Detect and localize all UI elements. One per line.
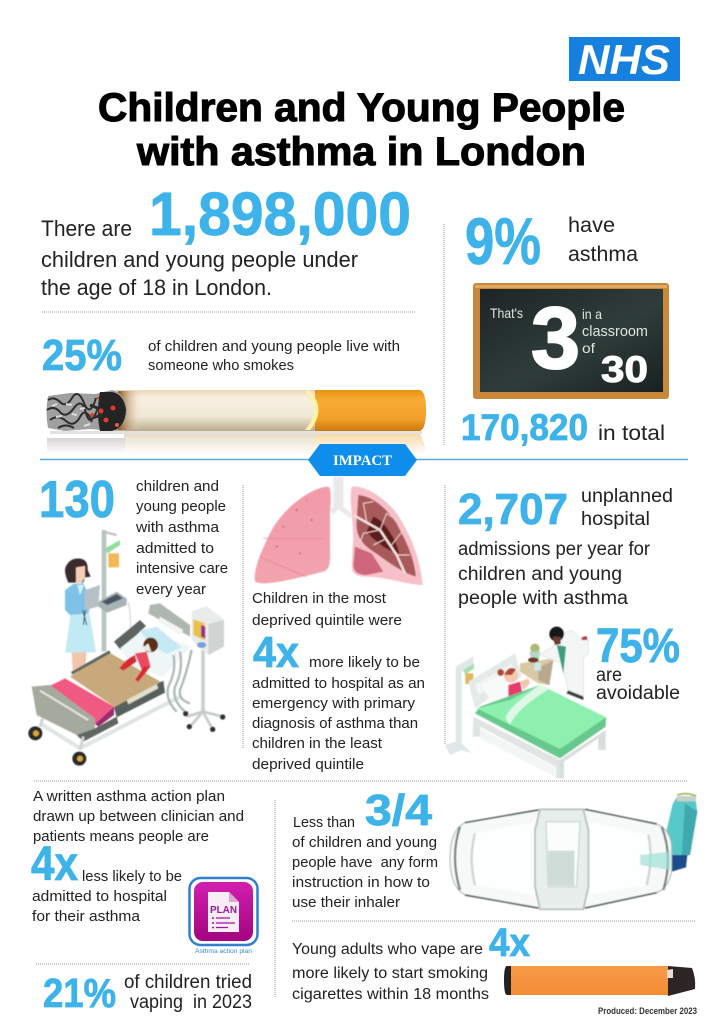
- panel: deprivation: diagnosis of asthma than: [252, 715, 418, 732]
- panel: intensive care: [39, 471, 228, 598]
- panel: 21 percent vaping: of children tried: [124, 972, 252, 993]
- panel: 25 percent smokers: 25%: [42, 331, 122, 380]
- panel: 75 percent avoidable: [596, 620, 680, 704]
- panel: 9 percent: 9%: [465, 204, 541, 278]
- panel: asthma action plan text: admitted to hospital: [32, 888, 167, 905]
- chalkboard: in a: [582, 306, 602, 322]
- icon: action plan: [190, 878, 258, 955]
- panel: vaping and smoking: Young adults who vape are: [292, 941, 483, 958]
- illustration: nurse and hospital bed: [28, 530, 225, 766]
- panel: asthma action plan text: less likely to be: [82, 868, 182, 885]
- panel: 21 percent vaping: [43, 970, 252, 1016]
- title: Children and Young People: [98, 86, 625, 130]
- chalkboard: That's: [490, 305, 523, 321]
- panel: inhaler instruction: instruction in how to: [292, 874, 430, 891]
- panel: 25 percent smokers: [42, 331, 400, 380]
- chalkboard: 3: [531, 290, 580, 387]
- illustration: lungs: [255, 477, 423, 585]
- panel: asthma action plan text: 4x: [31, 838, 78, 891]
- panel: inhaler instruction: use their inhaler: [292, 894, 400, 911]
- NHS logo: NHS: [578, 36, 670, 83]
- panel: intensive care: with asthma: [135, 519, 220, 536]
- panel: vaping and smoking: [292, 921, 530, 1003]
- panel: vaping and smoking: more likely to start smoking: [292, 965, 488, 982]
- panel: deprivation: 4x: [253, 628, 299, 677]
- panel: total: in total: [598, 422, 665, 445]
- panel: population headline: There are: [41, 216, 132, 241]
- chalkboard: 30: [601, 349, 648, 390]
- panel: vaping and smoking: cigarettes within 18 months: [292, 986, 489, 1003]
- chalkboard: classroom: [582, 323, 648, 340]
- divider line: [40, 458, 688, 460]
- chalkboard: of: [582, 340, 595, 356]
- panel: 21 percent vaping: vaping in 2023: [130, 992, 252, 1013]
- panel: unplanned admissions: 2,707: [458, 485, 568, 534]
- panel: deprivation: Children in the most: [252, 590, 387, 607]
- panel: population headline: [41, 180, 411, 300]
- panel: 9 percent: have: [568, 214, 615, 237]
- panel: total: 170,820: [461, 407, 588, 448]
- panel: deprivation: admitted to hospital as an: [252, 675, 425, 692]
- panel: population headline: the age of 18 in London.: [41, 275, 272, 300]
- panel: deprivation: emergency with primary: [252, 695, 416, 712]
- panel: total: [461, 407, 665, 448]
- chalkboard: [473, 283, 669, 399]
- illustration: spacer and inhaler: [450, 794, 697, 909]
- panel: inhaler instruction: 3/4: [365, 786, 433, 835]
- title: [98, 86, 625, 174]
- panel: intensive care: intensive care: [136, 560, 228, 577]
- panel: unplanned admissions: unplanned: [581, 486, 673, 507]
- panel: unplanned admissions: people with asthma: [458, 588, 628, 609]
- panel: inhaler instruction: of children and young: [292, 834, 437, 851]
- panel: intensive care: 130: [39, 471, 115, 529]
- panel: vaping and smoking: 4x: [489, 921, 530, 965]
- panel: deprivation: [252, 590, 425, 773]
- panel: unplanned admissions: children and young: [458, 564, 622, 585]
- panel: asthma action plan text: patients means people are: [33, 828, 209, 845]
- panel: inhaler instruction: people have any form: [292, 854, 438, 871]
- title: with asthma in London: [136, 130, 586, 174]
- panel: 9 percent: asthma: [568, 243, 638, 266]
- illustration: child in green bed with doctor: [445, 627, 606, 778]
- panel: unplanned admissions: hospital: [581, 509, 650, 530]
- panel: deprivation: deprived quintile: [252, 756, 364, 773]
- panel: population headline: 1,898,000: [149, 180, 411, 248]
- panel: asthma action plan text: for their asthma: [32, 908, 141, 925]
- panel: inhaler instruction: [292, 786, 438, 911]
- panel: asthma action plan text: drawn up between clinician and: [33, 808, 244, 825]
- panel: unplanned admissions: admissions per year for: [458, 539, 651, 560]
- panel: intensive care: admitted to: [136, 540, 214, 557]
- panel: unplanned admissions: [458, 485, 673, 609]
- panel: inhaler instruction: Less than: [293, 814, 355, 831]
- panel: deprivation: children in the least: [252, 735, 383, 752]
- panel: 25 percent smokers: of children and young people live with: [148, 338, 400, 355]
- badge: impact: [308, 444, 417, 476]
- panel: 9 percent: [465, 204, 638, 278]
- panel: asthma action plan text: [31, 788, 244, 925]
- panel: deprivation: deprived quintile were: [252, 612, 402, 629]
- icon: cigarette: [46, 390, 426, 454]
- panel: intensive care: young people: [136, 498, 226, 515]
- panel: asthma action plan text: A written asthma action plan: [33, 788, 225, 805]
- panel: 75 percent avoidable: are: [596, 665, 622, 686]
- panel: 75 percent avoidable: 75%: [596, 620, 680, 673]
- icon: action plan: PLAN: [210, 905, 237, 916]
- icon: action plan: Asthma action plan: [195, 948, 252, 955]
- panel: intensive care: every year: [136, 581, 206, 598]
- panel: 75 percent avoidable: avoidable: [596, 683, 680, 704]
- badge: impact: IMPACT: [333, 453, 392, 469]
- panel: population headline: children and young people under: [41, 247, 358, 272]
- footer: production date: Produced: December 2023: [598, 1006, 697, 1016]
- panel: intensive care: children and: [136, 478, 219, 495]
- panel: 21 percent vaping: 21%: [43, 970, 116, 1016]
- panel: deprivation: more likely to be: [309, 654, 420, 671]
- icon: vape: [504, 966, 695, 996]
- panel: 25 percent smokers: someone who smokes: [148, 357, 294, 374]
